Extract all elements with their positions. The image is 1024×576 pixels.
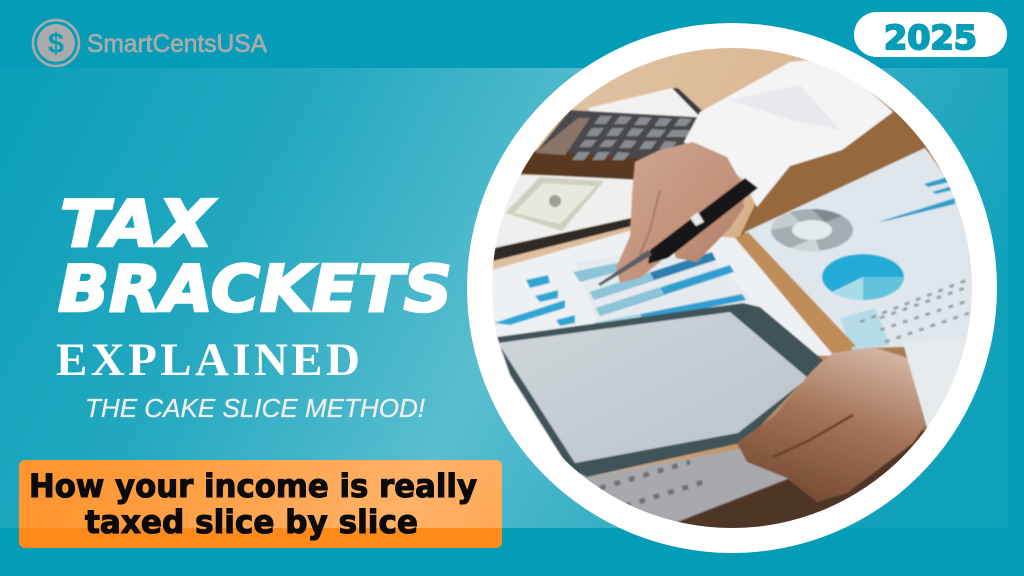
- logo wordmark: SmartCentsUSA: [87, 30, 267, 58]
- right-hand report: [745, 148, 980, 350]
- subtitle: THE CAKE SLICE METHOD!: [85, 393, 425, 423]
- year badge: [854, 12, 1007, 57]
- wood strip between documents: [735, 232, 856, 356]
- title: tax brackets: TAX: [60, 188, 216, 262]
- calculator: [520, 110, 712, 180]
- title: tax brackets: BRACKETS: [58, 253, 452, 327]
- left-hand chart report: [485, 228, 834, 356]
- banner text: taxed slice by slice: [85, 503, 418, 541]
- logo icon: dollar coin: [33, 20, 79, 66]
- year badge: 2025: [884, 18, 977, 57]
- logo: [33, 20, 267, 66]
- blue trend bars: [878, 176, 955, 222]
- lower keyboard document: [580, 448, 788, 522]
- holding hand: [737, 347, 925, 502]
- banner text: How your income is really: [29, 467, 477, 505]
- banner text: [29, 467, 477, 541]
- lighter gradient panel: [0, 68, 1008, 528]
- pie chart: [822, 254, 904, 300]
- orange banner: [19, 460, 502, 548]
- tablet edge under money: [494, 217, 632, 262]
- photo: hands with financial documents: [485, 40, 980, 540]
- dark wood beside sleeve: [740, 105, 935, 236]
- logo icon: dollar coin: $: [48, 28, 64, 60]
- data table: [840, 278, 972, 350]
- cuff: [903, 344, 966, 428]
- title: tax brackets: [58, 188, 452, 327]
- top notebook: [588, 87, 699, 118]
- tablet: [497, 303, 823, 477]
- wooden desk: [492, 48, 944, 477]
- pen: [598, 178, 758, 286]
- keyboard marks: [600, 462, 710, 506]
- title: explained: EXPLAINED: [56, 334, 360, 386]
- white sleeve: [684, 58, 893, 207]
- lower-left white area behind tablet: [498, 340, 586, 477]
- papers and money: [495, 174, 634, 249]
- pointing hand: [616, 142, 744, 283]
- dark desk at bottom: [676, 430, 926, 528]
- donut chart: [771, 209, 853, 251]
- white circle frame: [467, 23, 997, 553]
